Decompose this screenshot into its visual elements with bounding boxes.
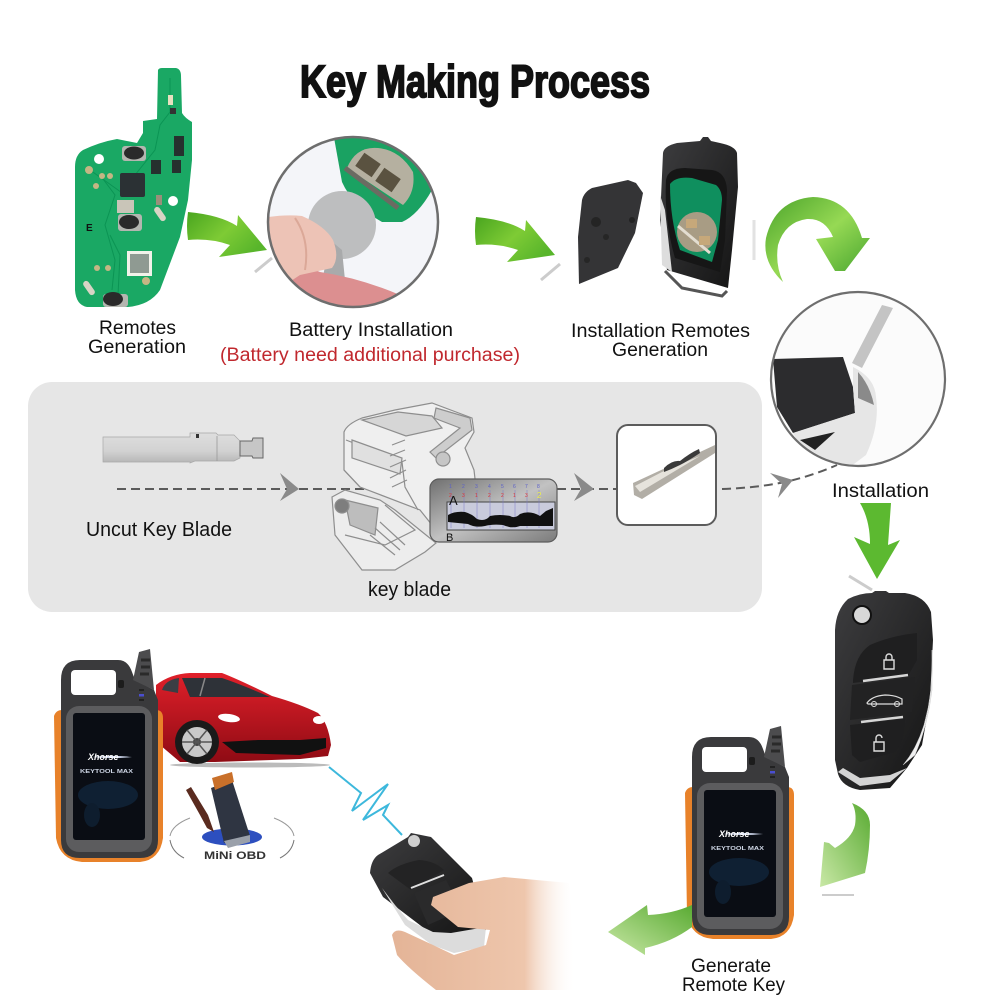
chart: key profile inset: 4 — [488, 484, 491, 490]
icon: lock button — [853, 633, 917, 683]
note: battery purchase: (Battery need additional purchase) — [220, 345, 520, 366]
chart: key profile inset: 1 — [475, 493, 478, 499]
label: battery installation: Battery Installation — [289, 320, 453, 341]
icon: programmer device small: Xhorse — [718, 829, 750, 839]
icon: key back cover — [578, 180, 643, 284]
label: generate remote key: Generate — [691, 956, 771, 977]
chart: key profile inset: 1 — [513, 493, 516, 499]
arrow: step one to two — [187, 212, 272, 272]
label: remotes generation — [88, 318, 186, 358]
arrow: dashed path to cut blade — [557, 473, 617, 501]
chart: key profile inset: 5 — [501, 484, 504, 490]
chart: key profile inset: 1 — [449, 484, 452, 490]
chart: key profile inset: 6 — [513, 484, 516, 490]
icon: uncut key blade — [103, 433, 263, 463]
icon: programmer device small — [685, 726, 794, 939]
icon: cut key blade card — [617, 425, 716, 525]
chart: key profile inset: B — [446, 532, 453, 544]
icon: programmer device large: Xhorse — [87, 752, 119, 762]
label: remotes generation: Generation — [88, 337, 186, 358]
icon: opened key with board — [660, 137, 738, 296]
chart: key profile inset: 2 — [537, 491, 542, 500]
label: battery installation — [220, 320, 520, 366]
chart: key profile inset: 3 — [462, 493, 465, 499]
arrow: to remote use — [608, 905, 692, 955]
label: generate remote key: Remote Key — [682, 975, 785, 996]
arrow: dashed path to installation — [722, 465, 837, 498]
chart: key profile inset: 2 — [501, 493, 504, 499]
arrow: to programmer — [820, 803, 870, 895]
title: Key Making Process — [300, 56, 650, 107]
icon: programmer device small: KEYTOOL MAX — [711, 846, 765, 852]
icon: unlock button — [850, 719, 905, 762]
icon: key cutting machine — [332, 403, 478, 570]
label: installation: Installation — [832, 481, 929, 502]
chart: key profile inset: 3 — [525, 493, 528, 499]
icon: wireless signal — [329, 767, 402, 835]
icon: green circuit board — [75, 68, 192, 307]
arrow: curved turn down — [754, 197, 870, 282]
chart: key profile inset: A — [449, 493, 458, 508]
chart: key profile inset: 3 — [475, 484, 478, 490]
icon: red sports car — [156, 673, 331, 768]
icon: car trunk button — [850, 677, 915, 720]
icon: finished flip key — [835, 591, 933, 790]
icon: mini obd dongle: MiNi OBD — [204, 850, 266, 862]
icon: green circuit board: E — [86, 223, 93, 234]
chip — [120, 173, 145, 197]
chart: key profile inset: 7 — [525, 484, 528, 490]
label: uncut key blade: Uncut Key Blade — [86, 519, 232, 541]
chart: key profile inset: 8 — [537, 484, 540, 490]
panel: key blade cutting — [28, 382, 762, 612]
panel: blade installation circle — [771, 292, 945, 470]
icon: programmer device large — [54, 649, 163, 862]
label: installation remotes generation: Generation — [612, 340, 708, 361]
chart: key profile inset: 2 — [449, 493, 452, 499]
icon: hand holding remote — [370, 833, 576, 990]
arrow: step two to three — [475, 217, 560, 280]
label: installation remotes generation: Installation Remotes — [571, 321, 750, 342]
label: remotes generation: Remotes — [99, 318, 176, 339]
arrow: dashed path to machine — [117, 473, 432, 501]
chart: key profile inset: 2 — [488, 493, 491, 499]
icon: programmer device large: KEYTOOL MAX — [80, 769, 134, 775]
panel: battery installation circle — [262, 132, 438, 312]
chart: key profile inset: 2 — [462, 484, 465, 490]
label: key blade: key blade — [368, 579, 451, 601]
icon: mini obd dongle — [170, 772, 294, 862]
arrow: down to finished key — [849, 503, 900, 590]
label: generate remote key — [682, 956, 785, 996]
label: installation remotes generation — [571, 321, 750, 361]
chart: key profile inset — [430, 479, 557, 544]
push buttons — [103, 146, 146, 307]
